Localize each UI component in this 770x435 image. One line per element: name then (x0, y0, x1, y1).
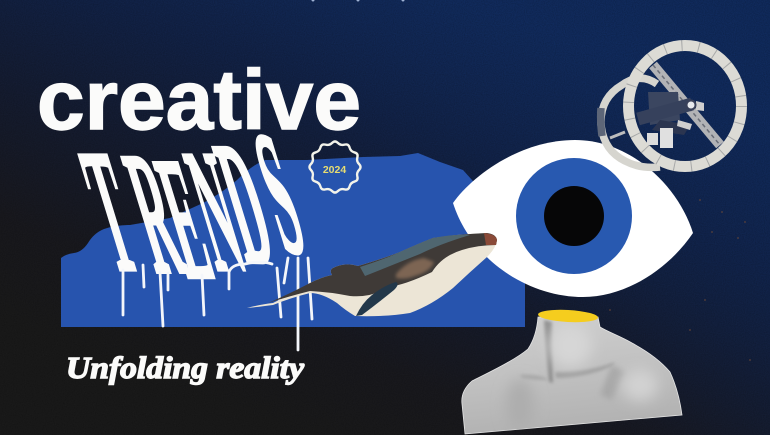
icon: eye (453, 140, 693, 297)
title: graffiti Trends (59, 96, 329, 350)
graffiti lettering: N (169, 114, 261, 308)
graffiti lettering: S (236, 96, 321, 290)
illustration: plaster bust (462, 308, 682, 434)
panel: blue torn backdrop (61, 153, 525, 327)
icon: space station (601, 46, 742, 167)
neck opening (538, 308, 598, 324)
badge: 2024: 2024 (323, 164, 346, 176)
illustration: humpback whale (247, 233, 497, 316)
title: creative: creative (37, 53, 361, 147)
graffiti lettering: E (139, 121, 229, 315)
badge: 2024 (309, 141, 361, 193)
graffiti lettering: D (198, 106, 291, 300)
subtitle: Unfolding reality (66, 350, 304, 385)
graffiti lettering: T (65, 114, 155, 308)
graffiti lettering: R (107, 116, 201, 310)
paint drips (123, 258, 312, 350)
